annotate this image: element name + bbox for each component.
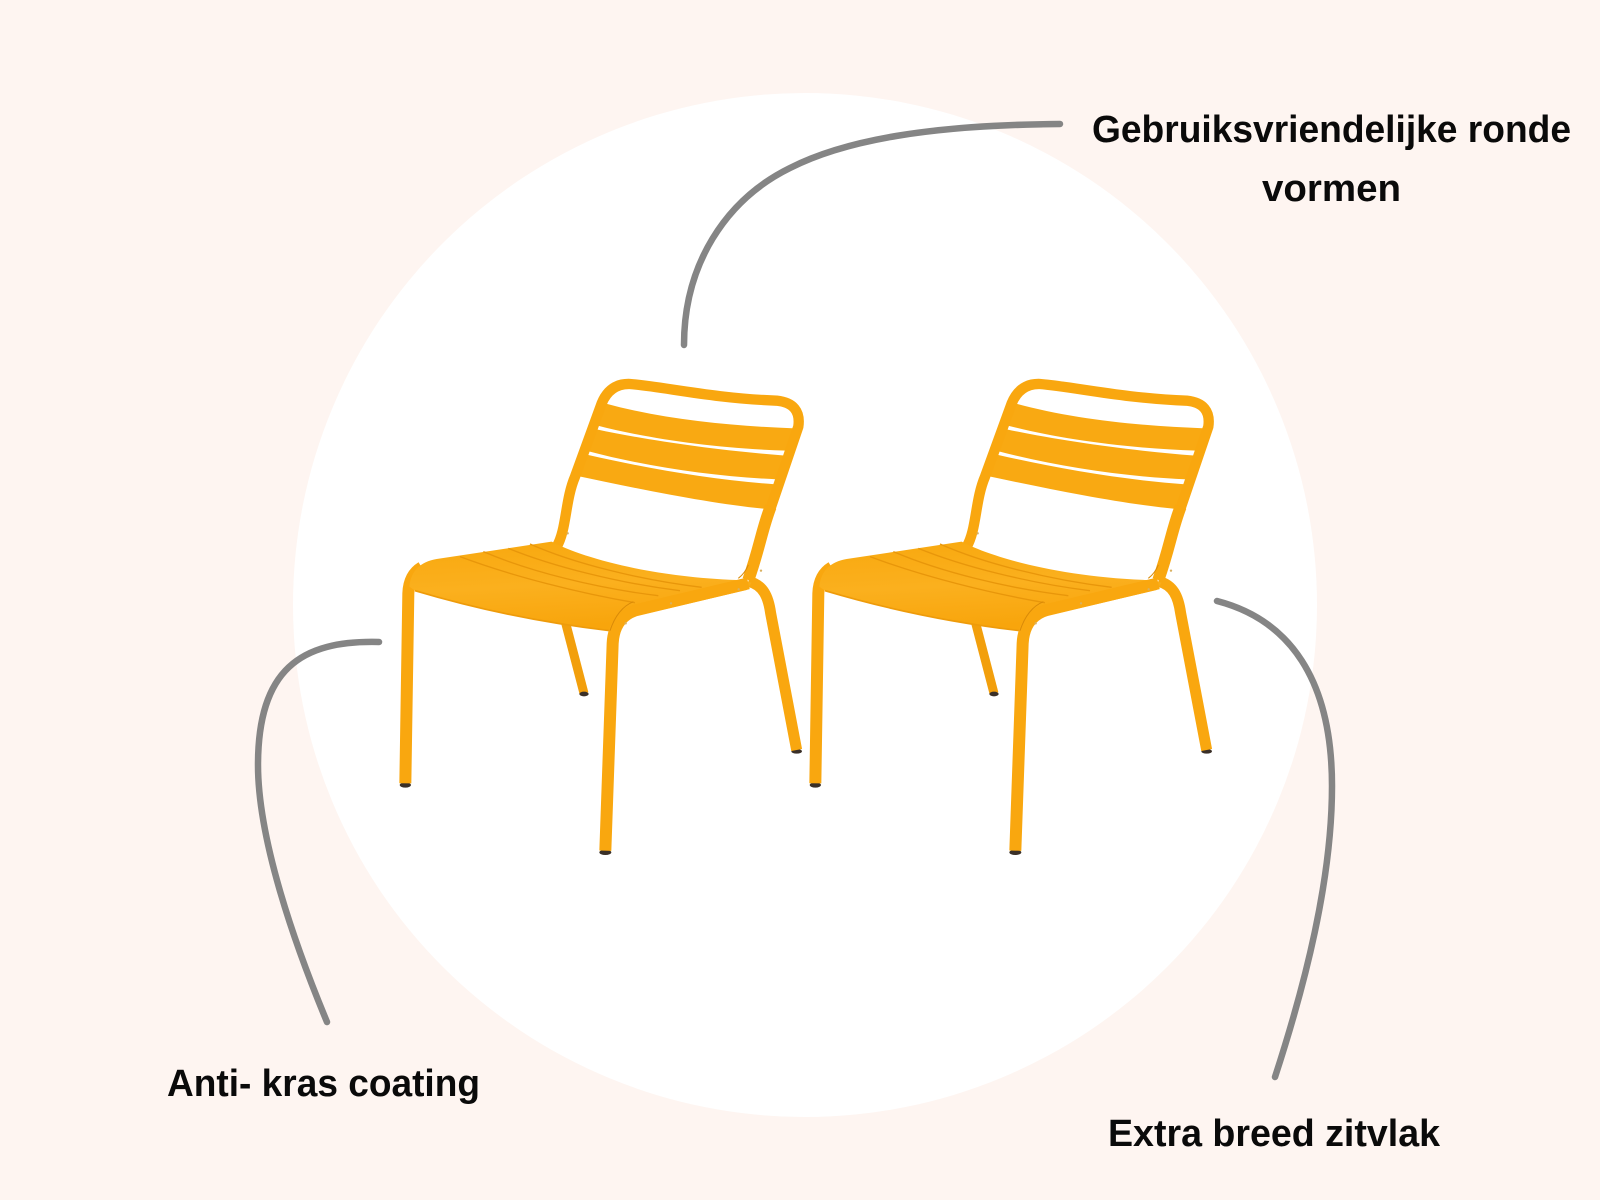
label: rounded shapes: Gebruiksvriendelijke ronde (1092, 109, 1571, 151)
callout line: extra wide seat (1217, 601, 1332, 1077)
callout line: rounded shapes (684, 124, 1060, 345)
chair: left (400, 384, 802, 855)
label: anti-scratch coating: Anti- kras coating (167, 1063, 480, 1105)
white circle backdrop (293, 93, 1317, 1117)
label: rounded shapes (1092, 109, 1571, 210)
chair: right (810, 384, 1212, 855)
label: rounded shapes: vormen (1262, 168, 1401, 210)
callout line: anti-scratch coating (258, 642, 379, 1022)
label: extra wide seat: Extra breed zitvlak (1108, 1113, 1441, 1155)
